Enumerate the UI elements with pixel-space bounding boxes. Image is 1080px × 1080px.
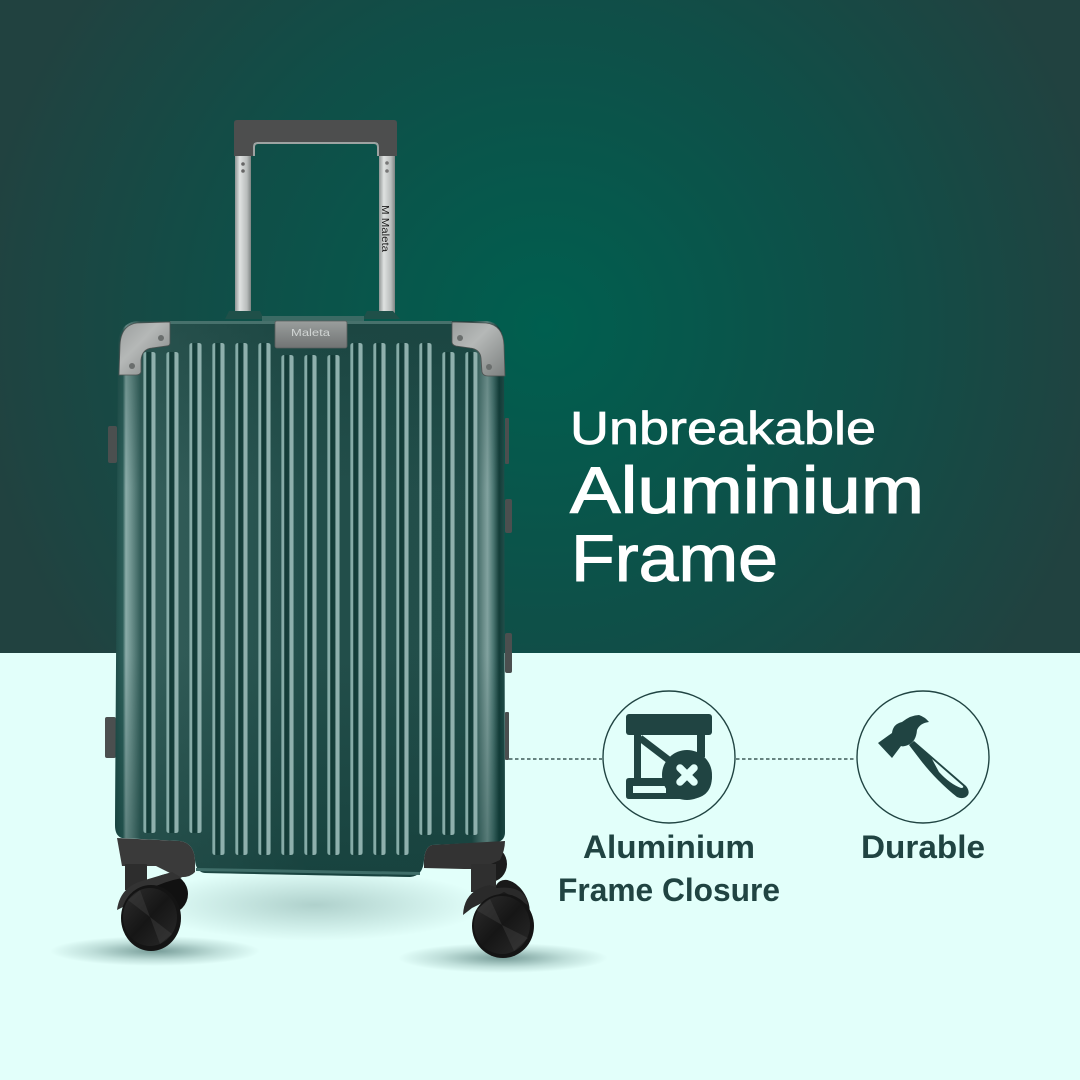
front right wheel <box>463 864 534 958</box>
light mint background panel <box>0 653 1080 1080</box>
label: Aluminium Frame Closure <box>558 829 780 908</box>
title <box>570 402 924 595</box>
label: Aluminium Frame Closure: Aluminium <box>583 829 755 865</box>
dashed connector lines <box>509 758 856 760</box>
suitcase shell <box>115 321 505 877</box>
title line: Frame: Frame <box>571 521 778 595</box>
bottom edge highlight <box>196 868 420 875</box>
suitcase back wheels <box>148 846 537 930</box>
corner wheel housing left <box>117 838 195 877</box>
floor shadows <box>50 869 608 973</box>
dark green background panel <box>0 0 1080 653</box>
vertical ribs <box>143 343 478 855</box>
shell shading <box>115 321 505 877</box>
side latches <box>105 418 512 760</box>
title line: Aluminium: Aluminium <box>570 453 924 527</box>
metal corner left <box>119 322 170 375</box>
icon: aluminium frame closure <box>603 691 735 823</box>
front left wheel <box>117 864 182 951</box>
top edge band <box>170 321 452 324</box>
handle brand text: M Maleta <box>379 205 390 252</box>
title line: Unbreakable: Unbreakable <box>570 402 876 454</box>
suitcase product image <box>105 120 537 958</box>
corner screws <box>129 335 492 370</box>
metal corner right <box>452 322 505 376</box>
brand plate <box>275 321 347 348</box>
brand plate: Maleta <box>291 327 330 339</box>
icon: hammer <box>857 691 989 823</box>
corner wheel housing right <box>424 841 505 869</box>
telescopic handle <box>225 120 400 321</box>
label: Durable: Durable <box>861 829 985 865</box>
label: Aluminium Frame Closure: Frame Closure <box>558 872 780 908</box>
